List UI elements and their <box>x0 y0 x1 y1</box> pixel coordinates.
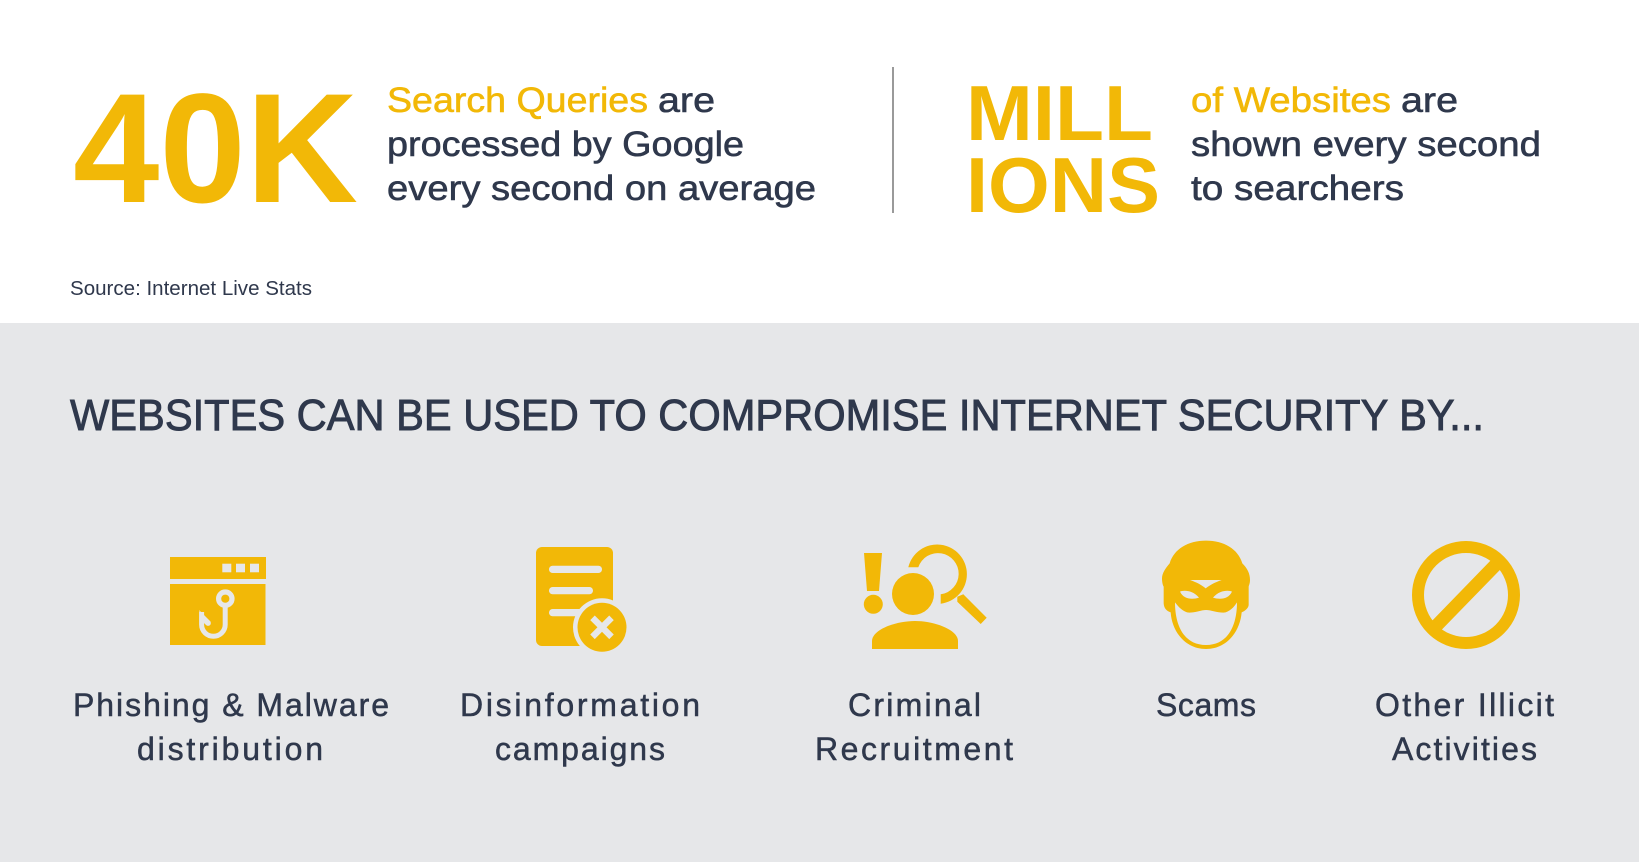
vertical divider <box>892 67 894 213</box>
label: disinformation campaigns <box>460 687 700 767</box>
stat: MILLIONS number: IONS <box>966 141 1160 229</box>
text block: websites description: are <box>1401 80 1458 120</box>
label: other illicit activities: Other Illicit <box>1375 687 1554 723</box>
panel: grey lower section background <box>0 323 1639 862</box>
text block: search queries description <box>387 80 816 208</box>
section heading: WEBSITES CAN BE USED TO COMPROMISE INTERNET SECURITY BY... <box>70 391 1484 440</box>
text block: search queries description: Search Queries <box>387 80 648 120</box>
label: criminal recruitment <box>815 687 1013 767</box>
text block: websites description: shown every second <box>1191 124 1541 164</box>
source note: Source: Internet Live Stats <box>70 277 312 300</box>
label: criminal recruitment: Recruitment <box>815 731 1013 767</box>
label: phishing and malware: Phishing & Malware <box>73 687 389 723</box>
icon: browser window with fishing hook <box>170 557 266 645</box>
icon: masked thief head <box>1162 541 1250 649</box>
label: disinformation campaigns: campaigns <box>495 731 665 767</box>
label: criminal recruitment: Criminal <box>848 687 981 723</box>
icon: person, magnifier and exclamation mark <box>864 545 987 649</box>
label: phishing and malware: distribution <box>137 731 323 767</box>
label: scams: Scams <box>1156 687 1256 723</box>
icon: prohibition sign <box>1418 547 1514 643</box>
text block: websites description <box>1191 80 1541 208</box>
stat: 40K number: 40K <box>73 62 358 236</box>
text block: websites description: of Websites <box>1191 80 1391 120</box>
label: other illicit activities <box>1375 687 1554 767</box>
stat: MILLIONS number <box>966 69 1160 229</box>
text block: search queries description: are <box>658 80 715 120</box>
label: other illicit activities: Activities <box>1392 731 1537 767</box>
stat: MILLIONS number: MILL <box>966 69 1153 157</box>
text block: websites description: to searchers <box>1191 168 1404 208</box>
icon: document with x badge <box>536 547 631 656</box>
label: phishing and malware <box>73 687 389 767</box>
text block: search queries description: every second on average <box>387 168 816 208</box>
label: disinformation campaigns: Disinformation <box>460 687 700 723</box>
text block: search queries description: processed by Google <box>387 124 744 164</box>
